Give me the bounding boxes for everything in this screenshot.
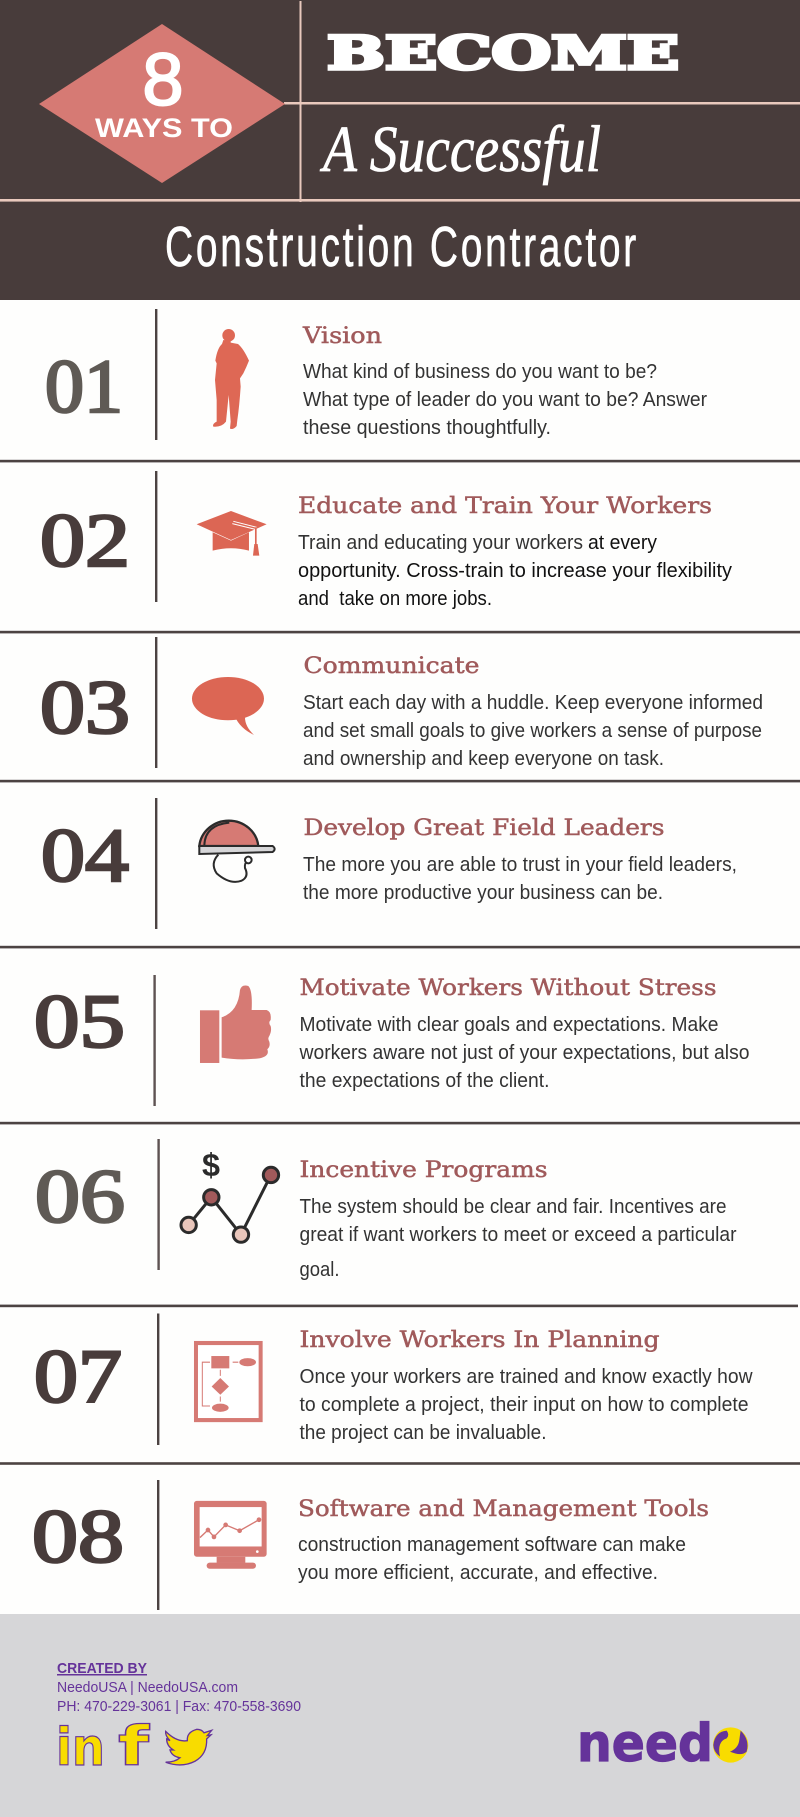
- number 05: 05: [34, 980, 125, 1064]
- icon: hard hat: [199, 821, 275, 882]
- text block: [303, 692, 763, 770]
- credits text: PH: 470-229-3061 | Fax: 470-558-3690: [57, 1698, 301, 1715]
- text block: the project can be invaluable.: [300, 1422, 546, 1444]
- text block: the more productive your business can be.: [303, 882, 663, 904]
- diamond badge: 8 ways to: 8: [142, 38, 184, 121]
- title: a successful: A Successful: [320, 113, 601, 186]
- text block: What type of leader do you want to be? Answer: [303, 389, 707, 411]
- heading: Motivate Workers Without Stress: [300, 976, 716, 1001]
- text block: [300, 1366, 753, 1444]
- credits text: NeedoUSA | NeedoUSA.com: [57, 1679, 238, 1696]
- heading: Vision: [302, 324, 382, 349]
- text block: The more you are able to trust in your field leaders,: [303, 854, 737, 876]
- number 08: 08: [32, 1495, 124, 1579]
- text block: [303, 361, 707, 439]
- text block: to complete a project, their input on how to complete: [300, 1394, 748, 1416]
- number 04: 04: [41, 814, 129, 898]
- number 01: 01: [45, 345, 123, 429]
- heading: Develop Great Field Leaders: [304, 816, 664, 841]
- text block: [298, 532, 732, 610]
- heading: Communicate: [304, 654, 480, 679]
- icon: speech bubble: [192, 677, 264, 735]
- panel: 05 motivate: [34, 975, 750, 1106]
- header banner: [0, 0, 800, 300]
- panel: 01 vision: [45, 309, 707, 440]
- text block: Train and educating your workers: [298, 532, 583, 554]
- icon: graduation cap: [197, 511, 267, 556]
- text block: [300, 1196, 737, 1281]
- text block: construction management software can make: [298, 1534, 686, 1556]
- text block: the expectations of the client.: [300, 1070, 550, 1092]
- text block: What kind of business do you want to be?: [303, 361, 657, 383]
- number 06: 06: [35, 1155, 125, 1239]
- text block: and set small goals to give workers a sense of purpose: [303, 720, 762, 742]
- text block: at every: [588, 532, 657, 554]
- panel: 02 educate and train: [40, 471, 732, 610]
- text block: [303, 854, 737, 904]
- text block: workers aware not just of your expectations, but also: [299, 1042, 750, 1064]
- icon: linkedin: in: [56, 1718, 105, 1778]
- logo: needo: need: [577, 1714, 713, 1774]
- text block: and ownership and keep everyone on task.: [303, 748, 664, 770]
- number 07: 07: [34, 1335, 122, 1419]
- diamond badge: 8 ways to: WAYS TO: [95, 113, 233, 143]
- text block: goal.: [300, 1259, 340, 1281]
- icon: twitter bird: [166, 1729, 212, 1765]
- text block: Motivate with clear goals and expectations. Make: [300, 1014, 718, 1036]
- credits text: CREATED BY: [57, 1660, 147, 1677]
- icon: monitor with chart: [194, 1501, 267, 1569]
- panel: 03 communicate: [40, 637, 763, 770]
- text block: great if want workers to meet or exceed a particular: [300, 1224, 737, 1246]
- text block: and take on more jobs.: [298, 588, 492, 610]
- text block: Start each day with a huddle. Keep everyone informed: [303, 692, 763, 714]
- text block: you more efficient, accurate, and effective.: [298, 1562, 658, 1584]
- panel: footer: [0, 1614, 800, 1817]
- number 03: 03: [40, 666, 130, 750]
- credits text: [57, 1660, 301, 1715]
- number 02: 02: [40, 499, 130, 583]
- icon: facebook: f: [118, 1715, 150, 1778]
- icon: standing man: [213, 329, 249, 429]
- diamond badge: 8 ways to: [39, 24, 285, 183]
- icon: dollar line chart: $: [202, 1147, 220, 1183]
- title: become: BECOME: [327, 26, 679, 80]
- panel: 04 field leaders: [41, 798, 737, 929]
- heading: Involve Workers In Planning: [300, 1328, 660, 1353]
- panel: 06 incentive programs: [35, 1139, 737, 1281]
- text block: these questions thoughtfully.: [303, 417, 551, 439]
- heading: Educate and Train Your Workers: [298, 494, 712, 519]
- text block: Once your workers are trained and know exactly how: [300, 1366, 753, 1388]
- icon: thumbs up: [200, 985, 271, 1063]
- icon: dollar line chart: [181, 1147, 279, 1242]
- text block: [299, 1014, 750, 1092]
- text block: The system should be clear and fair. Incentives are: [300, 1196, 726, 1218]
- panel: 08 software tools: [32, 1480, 709, 1610]
- text block: opportunity. Cross-train to increase your flexibility: [298, 560, 732, 582]
- heading: Software and Management Tools: [298, 1497, 709, 1522]
- icon: flowchart: [196, 1343, 261, 1420]
- panel: 07 involve workers: [34, 1314, 753, 1445]
- heading: Incentive Programs: [300, 1158, 548, 1183]
- text block: [298, 1534, 686, 1584]
